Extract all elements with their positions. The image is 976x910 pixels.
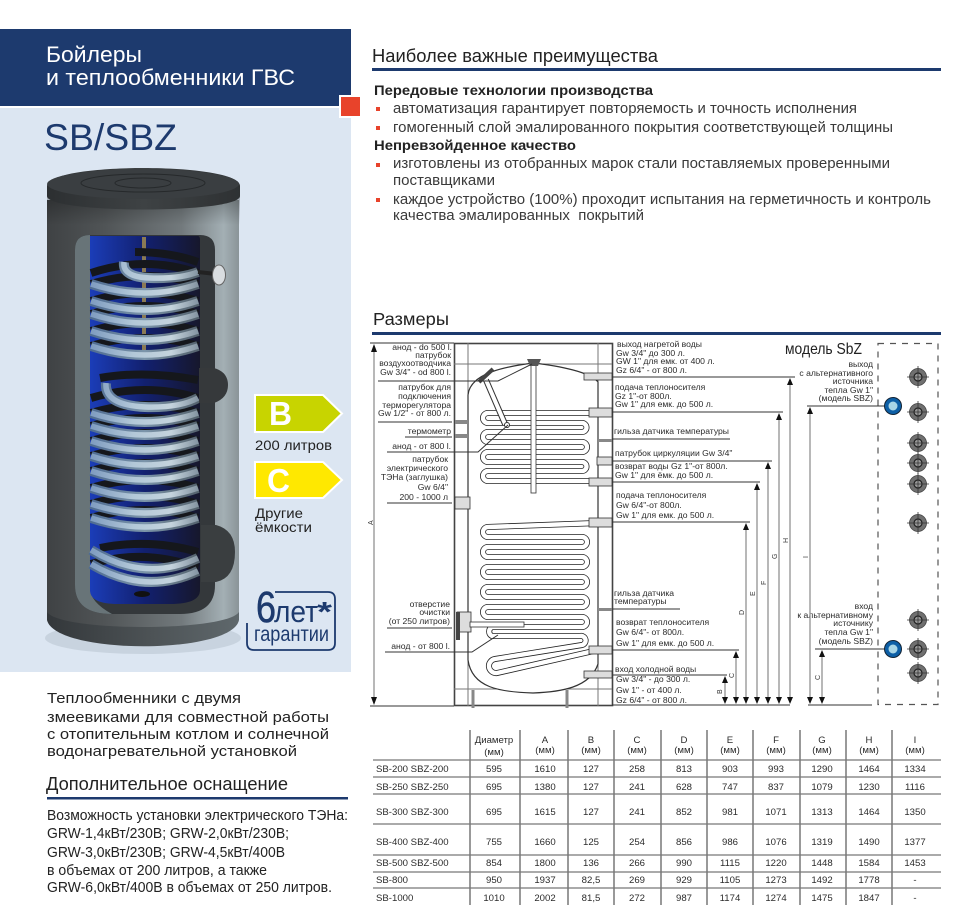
model SbZ side view: вход (855, 601, 873, 611)
heading: dimensions: Размеры (373, 309, 449, 329)
table header: (мм) (905, 745, 925, 756)
table rows: 82,5 (582, 875, 600, 886)
table rows: SB-250 SBZ-250 (376, 782, 449, 793)
table rows: 1660 (534, 837, 556, 848)
left callouts: подключения (398, 391, 451, 401)
panel: product background (0, 108, 351, 672)
table rows: 950 (486, 875, 502, 886)
table rows: 1010 (483, 893, 505, 904)
table rows: 852 (676, 807, 692, 818)
additional equipment text: в объемах от 200 литров, а также (47, 863, 267, 879)
dimension A arrow: A (368, 520, 375, 525)
table rows: 993 (768, 764, 784, 775)
left callouts: термометр (408, 426, 451, 436)
model SbZ side view: тепла Gw 1" (824, 627, 873, 637)
table rows: 695 (486, 782, 502, 793)
table rows (376, 764, 926, 904)
table rows: 755 (486, 837, 502, 848)
coils (91, 252, 198, 582)
table rows: 595 (486, 764, 502, 775)
table rows: 1610 (534, 764, 556, 775)
dimensions table (373, 730, 941, 905)
heading: additional equipment: Дополнительное оснащение (46, 774, 288, 794)
table rows: - (913, 893, 917, 904)
energy class C badge: C (267, 462, 290, 499)
left callouts: патрубок (415, 350, 451, 360)
right callouts: вход холодной воды (615, 664, 696, 674)
energy class C badge (255, 462, 342, 535)
left callouts: патрубок (412, 454, 448, 464)
model SbZ side view: (модель SBZ) (819, 393, 873, 403)
right callouts: возврат теплоносителя (616, 617, 709, 627)
right callouts: Gw 6/4"-от 800л. (616, 500, 682, 510)
table rows: 266 (629, 858, 645, 869)
left callouts: терморегулятора (382, 400, 451, 410)
model SbZ side view: источнику (833, 618, 874, 628)
warranty stamp: * (317, 596, 332, 627)
table rows: 628 (676, 782, 692, 793)
additional equipment text: Возможность установки электрического ТЭНа: (47, 808, 348, 824)
table rows: SB-500 SBZ-500 (376, 858, 449, 869)
top coil (483, 413, 598, 481)
table rows: 1464 (858, 764, 880, 775)
table rows: 1475 (811, 893, 833, 904)
table rows: 2002 (534, 893, 556, 904)
table rows: 990 (676, 858, 692, 869)
table rows: 1220 (765, 858, 787, 869)
red square marker (340, 96, 361, 117)
table header (475, 735, 925, 758)
table rows: 1453 (904, 858, 926, 869)
advantages list: изготовлены из отобранных марок стали поставляемых проверенными (393, 156, 890, 172)
right callouts: Gw 3/4" до 300 л. (616, 348, 685, 358)
dimension lines: H (783, 538, 790, 543)
left callouts: 200 - 1000 л (400, 492, 448, 502)
table rows: 1319 (811, 837, 833, 848)
table rows: 1377 (904, 837, 926, 848)
table rows: 127 (583, 782, 599, 793)
table rows: 695 (486, 807, 502, 818)
left callouts: очистки (419, 607, 450, 617)
table header: (мм) (720, 745, 740, 756)
table rows: SB-300 SBZ-300 (376, 807, 449, 818)
table rows: 1847 (858, 893, 880, 904)
right callouts: Gw 1" для емк. до 500 л. (615, 399, 713, 409)
table rows: 1448 (811, 858, 833, 869)
additional equipment text: GRW-6,0кВт/400В в объемах от 250 литров. (47, 880, 332, 896)
advantages list: поставщиками (393, 173, 495, 189)
table rows: 1492 (811, 875, 833, 886)
dimension lines: I (803, 556, 810, 558)
table rows: 986 (722, 837, 738, 848)
description text: с отопительным котлом и солнечной (47, 726, 329, 743)
table header: I (914, 735, 916, 746)
dimension lines: C (729, 673, 736, 678)
table rows: 1350 (904, 807, 926, 818)
table rows: 1800 (534, 858, 556, 869)
table rows: 1115 (720, 858, 740, 869)
description text: Теплообменники с двумя (47, 690, 241, 707)
table rows: 856 (676, 837, 692, 848)
table rows: 1174 (720, 893, 741, 904)
table rows: 1464 (858, 807, 880, 818)
header band: Бойлеры (46, 42, 142, 67)
table header: (мм) (812, 745, 832, 756)
model SbZ side view: к альтернативному (797, 610, 874, 620)
right callouts: патрубок циркуляции Gw 3/4" (615, 448, 732, 458)
energy class C badge: ёмкости (255, 519, 312, 535)
table rows: SB-200 SBZ-200 (376, 764, 449, 775)
heading rule (47, 797, 348, 800)
model SbZ side view (785, 341, 938, 705)
additional equipment text (47, 808, 348, 896)
left callouts: патрубок для (398, 382, 451, 392)
table rows: 837 (768, 782, 784, 793)
dimension lines: E (750, 591, 757, 596)
advantages list: автоматизация гарантирует повторяемость и точность исполнения (393, 101, 857, 117)
table rows: 269 (629, 875, 645, 886)
table rows: 854 (486, 858, 503, 869)
table rows: 241 (629, 807, 645, 818)
advantages list: гомогенный слой эмалированного покрытия соответствующей толщины (393, 120, 893, 136)
right callouts: температуры (614, 596, 667, 606)
table header: F (773, 735, 779, 746)
table rows: 813 (676, 764, 692, 775)
left callouts: Gw 1/2" - от 800 л. (378, 408, 451, 418)
warranty stamp: гарантии (254, 623, 329, 646)
advantages list: Передовые технологии производства (374, 82, 653, 98)
table header: (мм) (766, 745, 786, 756)
table rows: 254 (629, 837, 646, 848)
table rows: 136 (583, 858, 599, 869)
right callouts: Gz 6/4" - от 800 л. (616, 695, 687, 705)
dimension lines: C (815, 675, 822, 680)
table rows: 272 (629, 893, 645, 904)
table rows: - (913, 875, 917, 886)
table rows: 1105 (720, 875, 740, 886)
right callouts: гильза датчика температуры (614, 426, 729, 436)
energy class B badge (255, 395, 342, 453)
warranty stamp: лет (274, 594, 318, 629)
dimensions rule (372, 332, 941, 335)
table header: (мм) (484, 747, 504, 758)
right callouts: Gw 3/4" - до 300 л. (616, 674, 690, 684)
dimension lines (612, 377, 822, 705)
advantages list: Непревзойденное качество (374, 137, 576, 153)
left callouts: Gw 6/4" (418, 482, 448, 492)
table rows: 258 (629, 764, 645, 775)
dimension A arrow (368, 343, 454, 706)
table rows: SB-400 SBZ-400 (376, 837, 449, 848)
table rows: SB-800 (376, 875, 408, 886)
right callouts: GW 1" для емк. от 400 л. (616, 356, 715, 366)
description text (47, 690, 329, 760)
diagram: tank section (454, 343, 612, 708)
warranty stamp (247, 583, 335, 650)
right callouts: подача теплоносителя (615, 382, 706, 392)
table rows: 127 (583, 764, 599, 775)
table rows: 1273 (765, 875, 787, 886)
table rows: 81,5 (582, 893, 600, 904)
thermometer (198, 272, 216, 274)
left callouts: отверстие (410, 599, 450, 609)
table rows: 125 (583, 837, 599, 848)
energy class C badge: Другие (255, 505, 303, 521)
table header: Диаметр (475, 735, 513, 746)
table rows: 1334 (904, 764, 926, 775)
model SbZ side view: с альтернативного (799, 368, 873, 378)
left callouts: воздухоотводчика (379, 358, 451, 368)
right callouts: Gw 1" - от 400 л. (616, 685, 682, 695)
header band (0, 29, 351, 106)
left callouts: анод - от 800 l. (391, 641, 450, 651)
window frame (75, 235, 215, 614)
table rows: 1079 (811, 782, 833, 793)
right callouts: Gz 6/4" - от 800 л. (616, 365, 687, 375)
dimension lines: D (739, 610, 746, 615)
right callouts: выход нагретой воды (617, 339, 702, 349)
table rows: 127 (583, 807, 599, 818)
left callouts: (от 250 литров) (389, 616, 450, 626)
warranty stamp: 6 (256, 583, 276, 632)
table header: (мм) (535, 745, 555, 756)
dimension lines: G (772, 554, 779, 559)
table rows: 1290 (811, 764, 833, 775)
table rows: 1230 (858, 782, 880, 793)
dimension lines: F (761, 581, 768, 585)
left callouts: анод - от 800 l. (392, 441, 451, 451)
table rows: 1076 (765, 837, 787, 848)
table rows: 1313 (811, 807, 833, 818)
additional equipment text: GRW-1,4кВт/230В; GRW-2,0кВт/230В; (47, 826, 289, 842)
table rows: 1615 (534, 807, 556, 818)
model SbZ side view: тепла Gw 1" (824, 385, 873, 395)
table rows: 241 (629, 782, 645, 793)
left callouts (378, 342, 532, 652)
table header: B (588, 735, 594, 746)
advantages list (374, 82, 931, 224)
description text: змеевиками для совместной работы (47, 709, 329, 726)
right callouts: возврат воды Gz 1"-от 800л. (615, 461, 728, 471)
table rows: 1584 (858, 858, 880, 869)
table rows: SB-1000 (376, 893, 413, 904)
right callouts: Gw 6/4"- от 800л. (616, 627, 684, 637)
product title: SB/SBZ (44, 117, 177, 158)
table header: A (542, 735, 549, 746)
table rows: 1274 (765, 893, 787, 904)
table rows: 1380 (534, 782, 556, 793)
additional equipment text: GRW-3,0кВт/230В; GRW-4,5кВт/400В (47, 845, 285, 861)
anode and fittings (531, 364, 536, 493)
table rows: 1937 (534, 875, 556, 886)
table header: (мм) (674, 745, 694, 756)
energy class B badge: 200 литров (255, 437, 332, 453)
table rows: 929 (676, 875, 692, 886)
left callouts: анод - do 500 l. (392, 342, 452, 352)
dimension lines: B (717, 689, 724, 694)
table header: D (681, 735, 688, 746)
right callouts: подача теплоносителя (616, 490, 707, 500)
table rows: 1071 (765, 807, 787, 818)
table header: C (634, 735, 641, 746)
right callouts: гильза датчика (614, 588, 674, 598)
right callouts: Gz 1"-от 800л. (615, 391, 672, 401)
table header: (мм) (581, 745, 601, 756)
right callouts: Gw 1" для ёмк. до 500 л. (615, 470, 713, 480)
right callouts: Gw 1" для емк. до 500 л. (616, 638, 714, 648)
header band: и теплообменники ГВС (46, 65, 295, 90)
illustration: boiler cutaway (45, 168, 241, 654)
lower coil (483, 523, 598, 673)
table header: G (818, 735, 826, 746)
table rows: 987 (676, 893, 692, 904)
table rows: 981 (722, 807, 738, 818)
left callouts: электрического (387, 463, 448, 473)
heading: key advantages: Наиболее важные преимущества (372, 45, 659, 66)
table header: (мм) (627, 745, 647, 756)
advantages list: качества эмалированных покрытий (393, 208, 644, 224)
side caps (199, 368, 228, 403)
model SbZ side view: (модель SBZ) (819, 636, 873, 646)
left callouts: ТЭНа (заглушка) (381, 472, 448, 482)
table rows: 747 (722, 782, 738, 793)
model SbZ side view: выход (848, 359, 873, 369)
left callouts: Gw 3/4" - od 800 l. (380, 367, 451, 377)
right callouts: Gw 1" для емк. до 500 л. (616, 510, 714, 520)
model SbZ side view: источника (833, 376, 873, 386)
table rows: 1778 (858, 875, 880, 886)
table header: H (866, 735, 873, 746)
advantages list: каждое устройство (100%) проходит испытания на герметичность и контроль (393, 192, 931, 208)
table rows: 1490 (858, 837, 880, 848)
right callouts (614, 339, 732, 705)
description text: водонагревательной установкой (47, 743, 297, 760)
energy class B badge: B (269, 395, 292, 432)
heading rule (372, 68, 941, 71)
table header: E (727, 735, 733, 746)
table header: (мм) (859, 745, 879, 756)
model SbZ side view: модель SbZ (785, 341, 862, 358)
table rows: 1116 (905, 782, 925, 793)
table rows: 903 (722, 764, 738, 775)
